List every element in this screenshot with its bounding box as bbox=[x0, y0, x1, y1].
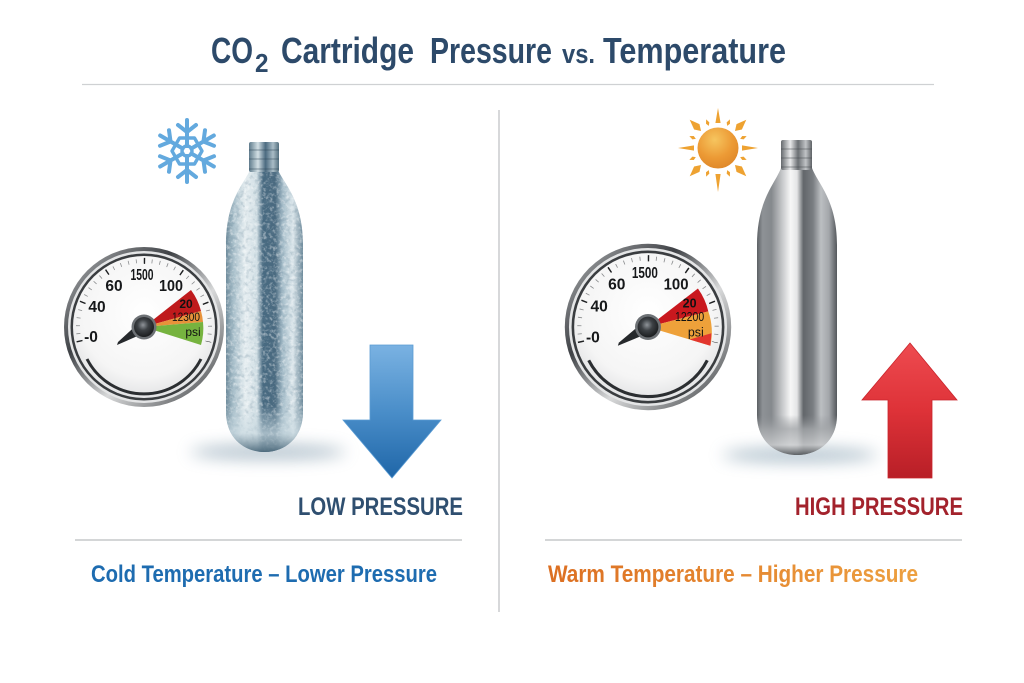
icon: sun bbox=[678, 108, 758, 192]
label: high pressure: HIGH PRESSURE bbox=[795, 493, 963, 521]
title: Cartridge bbox=[281, 30, 414, 71]
gauge: high: 12200 bbox=[675, 310, 704, 324]
dial zone: green red bbox=[144, 290, 203, 345]
gauge: low: psi bbox=[185, 325, 201, 339]
gauge: high: -0 bbox=[586, 330, 600, 347]
gauge: low: 20 bbox=[179, 297, 193, 311]
title: Temperature bbox=[603, 30, 786, 71]
needle bbox=[117, 321, 149, 345]
gauge: high: psi bbox=[688, 325, 704, 339]
caption: warm: Warm Temperature – Higher Pressure bbox=[548, 561, 918, 588]
gauge: low: -0 bbox=[84, 329, 98, 346]
gauge: high bbox=[565, 244, 731, 410]
cartridge: frosted bbox=[190, 142, 346, 459]
panel: warm bbox=[545, 108, 963, 588]
dial zone: orange red bbox=[648, 289, 712, 346]
label: low pressure: LOW PRESSURE bbox=[298, 493, 463, 521]
cartridge: steel bbox=[722, 140, 878, 462]
icon: snowflake bbox=[156, 120, 218, 182]
gauge: high: 40 bbox=[590, 298, 608, 315]
needle bbox=[618, 321, 653, 346]
gauge: high: 60 bbox=[608, 277, 626, 294]
caption: cold: Cold Temperature – Lower Pressure bbox=[91, 561, 437, 588]
panel: cold bbox=[64, 120, 463, 588]
gauge: high: 20 bbox=[683, 296, 697, 310]
title bbox=[211, 30, 786, 78]
title: 2 bbox=[255, 48, 268, 78]
hub bbox=[132, 314, 156, 340]
gauge: low: 60 bbox=[105, 278, 123, 295]
gauge: low: 1500 bbox=[130, 267, 154, 284]
gauge: low: 12300 bbox=[172, 310, 200, 324]
gauge: low: 100 bbox=[159, 278, 183, 295]
title: vs. bbox=[562, 39, 595, 69]
hub bbox=[635, 314, 661, 340]
gauge: high: 1500 bbox=[632, 265, 658, 282]
gauge: low bbox=[64, 247, 224, 407]
gauge: high: 100 bbox=[664, 277, 689, 294]
arrow: up bbox=[862, 343, 957, 478]
gauge: low: 40 bbox=[88, 299, 106, 316]
arrow: down bbox=[343, 345, 441, 478]
title: Pressure bbox=[430, 30, 552, 71]
title: CO bbox=[211, 30, 253, 71]
